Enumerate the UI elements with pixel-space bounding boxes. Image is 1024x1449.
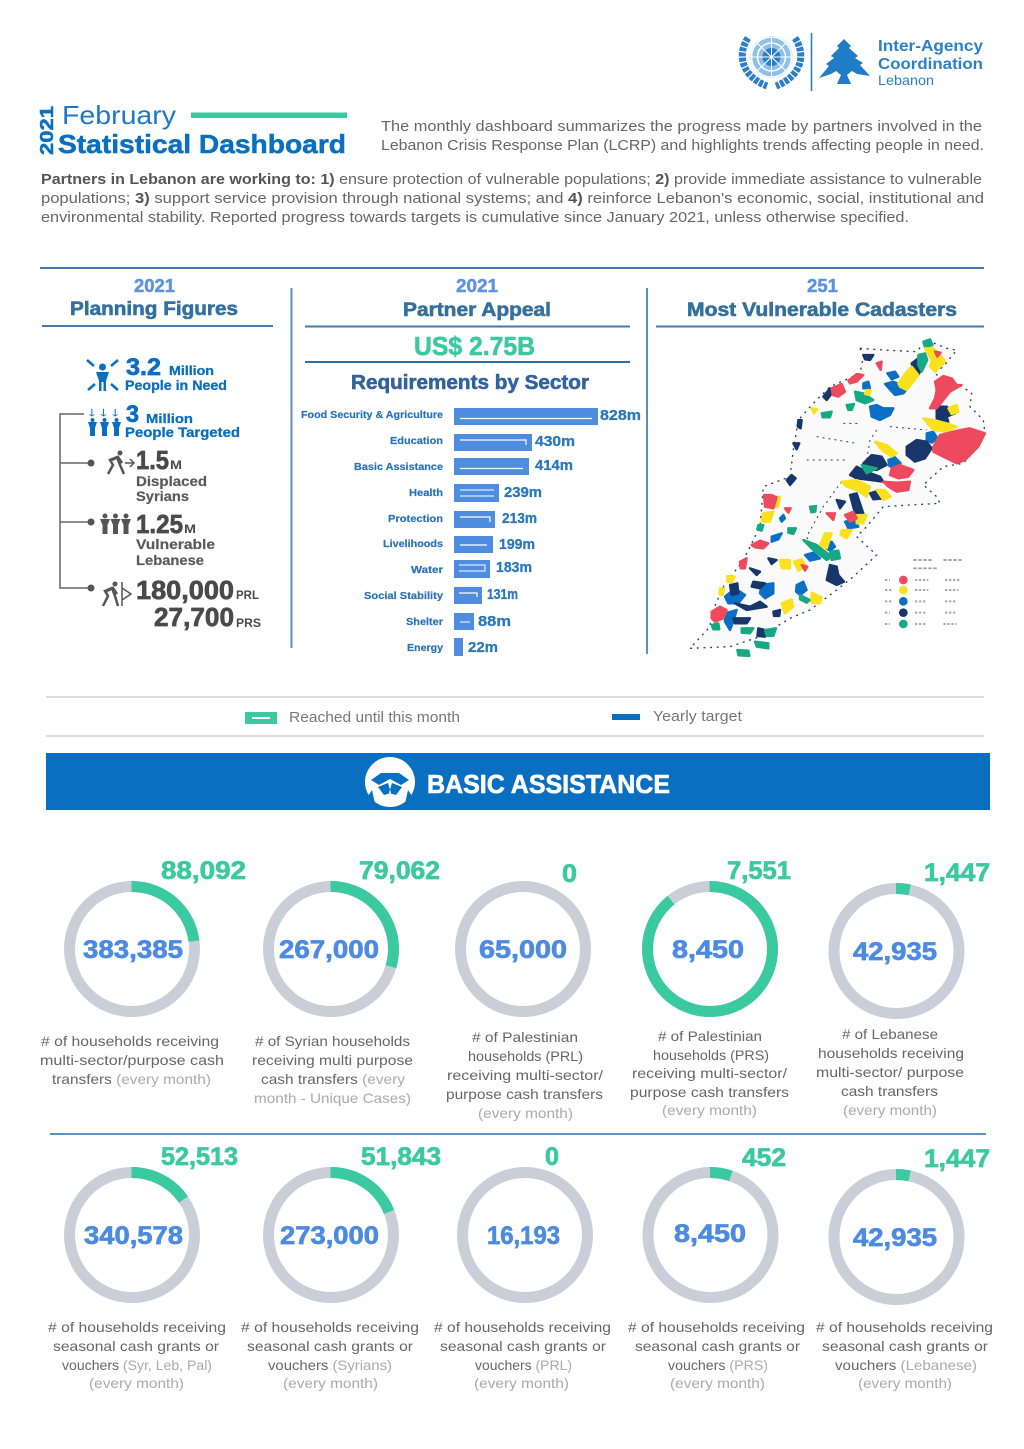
indicator: PRL households: # of Palestinian [472, 1029, 578, 1045]
indicator: PRL households: receiving multi-sector/ [447, 1067, 603, 1083]
indicator: Lebanese households: cash transfers [841, 1083, 938, 1099]
logo: Inter-Agency Coordination Lebanon [742, 33, 983, 91]
title block: 2021 [37, 106, 57, 155]
figure: people in need: People in Need [125, 377, 227, 393]
indicator: seasonal all cohorts: seasonal cash grants or [53, 1338, 219, 1354]
bar chart: requirements by sector: Social Stability [364, 591, 443, 602]
bar chart: requirements by sector: Livelihoods [383, 539, 443, 550]
indicator: seasonal Syrians [241, 1143, 441, 1391]
title block [37, 100, 347, 159]
indicator: PRL households [446, 860, 603, 1121]
bar chart: requirements by sector: 88m [478, 613, 511, 630]
icon: Lebanese family [100, 514, 131, 534]
figure: people targeted: 3 [126, 401, 139, 428]
bar chart: requirements by sector: Shelter [406, 617, 443, 628]
bar chart: requirements by sector: Protection [388, 514, 443, 525]
figure: Palestine refugees: PRL [236, 588, 259, 602]
indicator: seasonal Lebanese: 42,935 [853, 1224, 937, 1252]
logo text: Lebanon [878, 72, 934, 88]
figure: vulnerable Lebanese [136, 509, 215, 568]
indicator: seasonal PRL: # of households receiving [434, 1319, 611, 1335]
indicator: Syrian households MPC: month - Unique Cases) [254, 1090, 411, 1106]
indicator: seasonal Syrians: seasonal cash grants or [247, 1338, 413, 1354]
indicator: PRL households: households (PRL) [468, 1048, 583, 1064]
legend strip [46, 696, 984, 737]
figure: vulnerable Lebanese: Vulnerable [136, 536, 215, 552]
figure: people targeted: Million [146, 411, 193, 426]
indicator: seasonal PRL: seasonal cash grants or [440, 1338, 606, 1354]
panel: planning figures [42, 276, 273, 632]
indicator: seasonal PRS [628, 1144, 805, 1391]
heading: partner appeal: Partner Appeal [403, 300, 551, 321]
indicator: seasonal PRL [434, 1143, 611, 1391]
bar chart: requirements by sector: 131m [487, 586, 518, 603]
indicator: Lebanese households: 42,935 [853, 938, 937, 966]
figure: people targeted: People Targeted [125, 424, 240, 440]
indicator: MCAP households: transfers (every month) [52, 1071, 211, 1087]
figure: Palestine refugees [136, 575, 261, 632]
icon: basic assistance [365, 757, 415, 808]
indicator: MCAP households: 383,385 [83, 936, 183, 964]
indicator: seasonal Lebanese: # of households receiving [816, 1319, 993, 1335]
bar chart: requirements by sector: Health [409, 488, 443, 499]
indicator: seasonal Syrians: 51,843 [361, 1143, 441, 1171]
intro text: Lebanon Crisis Response Plan (LCRP) and highlights trends affecting people in need. [381, 137, 984, 154]
indicator: PRS households: (every month) [662, 1102, 757, 1118]
indicator: seasonal PRL: (every month) [474, 1375, 569, 1391]
bar chart: requirements by sector: Food Security & Agriculture [301, 410, 443, 421]
icon: cedar tree [819, 39, 870, 84]
heading: planning figures: Planning Figures [70, 299, 238, 320]
indicator: Lebanese households [816, 859, 990, 1118]
logo text [878, 38, 983, 88]
indicator: seasonal PRS: # of households receiving [628, 1319, 805, 1335]
figure: displaced Syrians: Syrians [136, 488, 189, 504]
indicator: PRS households: households (PRS) [653, 1047, 769, 1063]
banner: basic assistance: BASIC ASSISTANCE [427, 769, 670, 799]
figure: vulnerable Lebanese: 1.25 [136, 509, 183, 539]
heading: cadasters [656, 276, 984, 328]
tree connector [60, 414, 94, 592]
icon: person in need [87, 360, 118, 391]
intro text: The monthly dashboard summarizes the progress made by partners involved in the [381, 118, 982, 135]
bar chart: requirements by sector [301, 407, 641, 656]
indicator: PRL households: 0 [562, 860, 577, 888]
indicator: Lebanese households: households receiving [818, 1045, 964, 1061]
title block: February [62, 100, 176, 130]
figure: Palestine refugees: PRS [236, 616, 261, 630]
figure: Palestine refugees: 180,000 [136, 575, 234, 605]
indicator: seasonal Lebanese [816, 1145, 993, 1391]
indicator: seasonal all cohorts: # of households receiving [48, 1319, 226, 1335]
indicator: Lebanese households: multi-sector/ purpose [816, 1064, 964, 1080]
bar chart: requirements by sector: Education [390, 436, 443, 447]
indicator: Lebanese households: 1,447 [924, 859, 990, 887]
indicator: Lebanese households: # of Lebanese [842, 1026, 938, 1042]
figure: people in need [125, 354, 227, 393]
heading: requirements by sector: Requirements by Sector [351, 372, 589, 394]
heading: planning figures [42, 276, 273, 327]
legend: reached: Reached until this month [289, 709, 460, 726]
icon: people targeted: ↓↓↓ [86, 404, 121, 419]
indicator: seasonal PRL: vouchers (PRL) [475, 1357, 572, 1373]
heading: partner appeal: 2021 [456, 276, 498, 296]
indicator: seasonal Lebanese: seasonal cash grants or [822, 1338, 988, 1354]
indicator: seasonal PRS: (every month) [670, 1375, 765, 1391]
indicator: seasonal PRS: 452 [742, 1144, 786, 1172]
indicator: MCAP households: # of households receiving [41, 1033, 219, 1049]
icon: UN emblem [742, 36, 801, 86]
indicator: Syrian households MPC: receiving multi purpose [252, 1052, 413, 1068]
legend: target: Yearly target [653, 708, 743, 725]
figure: people in need: Million [169, 363, 214, 378]
panel: partner appeal [301, 276, 641, 656]
figure: displaced Syrians [136, 445, 207, 504]
indicator: PRS households: purpose cash transfers [630, 1084, 789, 1100]
bar chart: requirements by sector: 22m [468, 639, 498, 656]
bar chart: requirements by sector: 430m [535, 433, 575, 450]
map: Lebanon cadasters [690, 339, 985, 656]
indicator: seasonal Lebanese: (every month) [858, 1375, 952, 1391]
indicator: seasonal Lebanese: vouchers (Lebanese) [835, 1357, 977, 1373]
heading: partner appeal [305, 276, 630, 328]
bar chart: requirements by sector: 239m [504, 484, 542, 501]
figure: displaced Syrians: M [170, 458, 182, 472]
logo text: Coordination [878, 56, 983, 73]
indicator: seasonal Syrians: vouchers (Syrians) [268, 1357, 392, 1373]
logo text: Inter-Agency [878, 38, 983, 55]
indicator: Syrian households MPC [252, 857, 440, 1106]
indicator: seasonal all cohorts [48, 1143, 238, 1391]
objectives paragraph: populations; 3) support service provision through national systems; and 4) reinforce Lebanon's economic, social, institutional and [41, 190, 984, 207]
bar chart: requirements by sector: Water [411, 565, 443, 576]
indicator: Syrian households MPC: # of Syrian households [255, 1033, 410, 1049]
icon: displaced person arrow [108, 450, 134, 474]
indicator: MCAP households: 88,092 [161, 857, 246, 885]
indicator: PRS households: receiving multi-sector/ [632, 1065, 787, 1081]
figure: vulnerable Lebanese: M [184, 522, 196, 536]
indicator: MCAP households [40, 857, 246, 1087]
indicator: PRL households: (every month) [478, 1105, 573, 1121]
indicator: Lebanese households: (every month) [843, 1102, 937, 1118]
heading: cadasters: Most Vulnerable Cadasters [687, 300, 957, 321]
indicator: seasonal Lebanese: 1,447 [924, 1145, 990, 1173]
objectives paragraph: environmental stability. Reported progress towards targets is cumulative since January 2021, unless otherwise specified. [41, 209, 909, 226]
indicator: seasonal PRS: vouchers (PRS) [668, 1357, 768, 1373]
indicator: seasonal PRL: 16,193 [487, 1222, 560, 1250]
objectives paragraph: Partners in Lebanon are working to: 1) ensure protection of vulnerable populations; 2) provide immediate assistance to vulnerable [41, 171, 982, 188]
figure: displaced Syrians: 1.5 [136, 445, 169, 475]
indicator: seasonal PRL: 0 [545, 1143, 559, 1171]
indicator: seasonal PRS: seasonal cash grants or [635, 1338, 800, 1354]
indicator: seasonal all cohorts: 340,578 [84, 1222, 183, 1250]
figure: vulnerable Lebanese: Lebanese [136, 552, 204, 568]
map legend [885, 560, 963, 628]
indicator: MCAP households: multi-sector/purpose cash [40, 1052, 224, 1068]
indicator: PRS households: 7,551 [727, 857, 791, 885]
bar chart: requirements by sector: 183m [496, 559, 532, 576]
heading: cadasters: 251 [807, 276, 838, 296]
indicator: PRS households [630, 857, 791, 1118]
indicator: PRL households: purpose cash transfers [446, 1086, 603, 1102]
figure: people in need: 3.2 [126, 354, 161, 381]
indicator: seasonal all cohorts: (every month) [89, 1375, 184, 1391]
indicator: seasonal all cohorts: vouchers (Syr, Leb, Pal) [62, 1357, 212, 1373]
indicator: PRS households: # of Palestinian [658, 1028, 762, 1044]
bar chart: requirements by sector: Basic Assistance [354, 462, 443, 473]
objectives paragraph [41, 171, 984, 226]
indicator: seasonal Syrians: # of households receiving [241, 1319, 419, 1335]
indicator: seasonal all cohorts: 52,513 [161, 1143, 238, 1171]
bar chart: requirements by sector: 828m [600, 407, 641, 424]
bar chart: requirements by sector: Energy [407, 643, 443, 654]
bar chart: requirements by sector: 414m [535, 457, 573, 474]
icon: people targeted [86, 404, 121, 436]
bar chart: requirements by sector: 213m [502, 510, 537, 527]
indicator: seasonal Syrians: (every month) [283, 1375, 378, 1391]
heading: planning figures: 2021 [134, 276, 175, 296]
bar chart: requirements by sector: 199m [499, 536, 535, 553]
indicator: Syrian households MPC: 267,000 [279, 936, 379, 964]
legend: target [612, 708, 743, 725]
indicator: seasonal Syrians: 273,000 [280, 1222, 379, 1250]
indicator: PRS households: 8,450 [672, 936, 744, 964]
figure: Palestine refugees: 27,700 [154, 602, 234, 632]
indicator: Syrian households MPC: 79,062 [359, 857, 440, 885]
indicator: PRL households: 65,000 [479, 936, 567, 964]
panel: most vulnerable cadasters [656, 276, 985, 656]
title block: Statistical Dashboard [58, 129, 346, 159]
indicator: Syrian households MPC: cash transfers (every [261, 1071, 405, 1087]
banner: basic assistance [46, 753, 990, 810]
figure: people targeted [125, 401, 240, 440]
intro text [381, 118, 984, 154]
icon: Palestine refugees [103, 582, 131, 606]
appeal amount: US$ 2.75B [414, 331, 535, 361]
figure: displaced Syrians: Displaced [136, 473, 207, 489]
indicator: seasonal PRS: 8,450 [674, 1220, 746, 1248]
